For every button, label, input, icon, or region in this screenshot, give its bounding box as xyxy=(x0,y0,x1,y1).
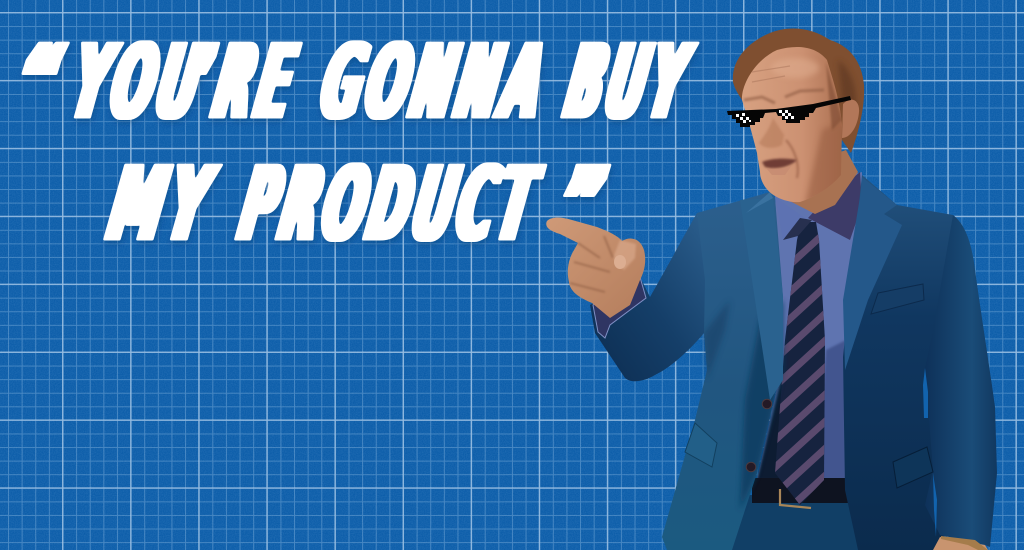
lower lip xyxy=(768,169,786,175)
headline line 1: ’ xyxy=(181,23,226,143)
nose xyxy=(759,118,784,148)
hair shade xyxy=(838,60,856,115)
wrist hand bottom right xyxy=(933,536,988,550)
headline quote xyxy=(5,22,700,265)
jaw shadow xyxy=(804,124,842,200)
thumb nail xyxy=(614,255,626,269)
jacket: right panel xyxy=(843,175,966,550)
headline line 2 xyxy=(101,144,620,265)
headline line 1: RE xyxy=(206,23,308,143)
jacket: left panel xyxy=(662,192,783,550)
belt xyxy=(752,478,848,508)
face xyxy=(742,47,845,205)
jacket: right lapel xyxy=(843,177,902,370)
nasolabial fold xyxy=(786,140,798,178)
brow xyxy=(744,90,824,103)
temple shadow xyxy=(826,62,842,130)
headline line 1: YOU xyxy=(63,23,215,143)
mouth xyxy=(762,159,797,168)
headline line 1 xyxy=(5,22,700,144)
jacket: right hip flap xyxy=(893,447,933,488)
jacket: left lapel xyxy=(740,198,783,400)
headline line 1: BUY xyxy=(558,22,700,144)
headline line 1: GONNA xyxy=(313,23,558,143)
shirt collar xyxy=(776,172,862,240)
jacket: left shade xyxy=(740,300,783,510)
shirt cuff xyxy=(593,277,646,338)
jacket: gorge xyxy=(746,192,773,213)
jacket buttons xyxy=(746,399,772,472)
jacket: left hip flap xyxy=(685,423,717,467)
figure: man in blue suit pointing xyxy=(546,29,997,550)
headline line 2: ” xyxy=(549,144,620,265)
headline line 2: PRODUCT xyxy=(232,145,549,265)
headline line 1: “ xyxy=(5,22,76,143)
ear xyxy=(842,100,859,138)
hair xyxy=(733,29,864,153)
pointing hand xyxy=(546,218,645,318)
trousers xyxy=(725,495,866,550)
neck xyxy=(780,150,858,214)
shirt xyxy=(757,172,862,480)
pointing arm sleeve xyxy=(590,213,705,381)
gap between arm and torso xyxy=(923,368,937,537)
headline line 2: MY xyxy=(101,144,224,265)
jacket: right sleeve xyxy=(925,215,997,547)
forehead wrinkles xyxy=(752,66,790,82)
forehead highlight xyxy=(771,58,819,78)
jacket: breast pocket xyxy=(871,284,924,314)
pixel sunglasses xyxy=(727,96,851,127)
necktie xyxy=(775,222,825,505)
